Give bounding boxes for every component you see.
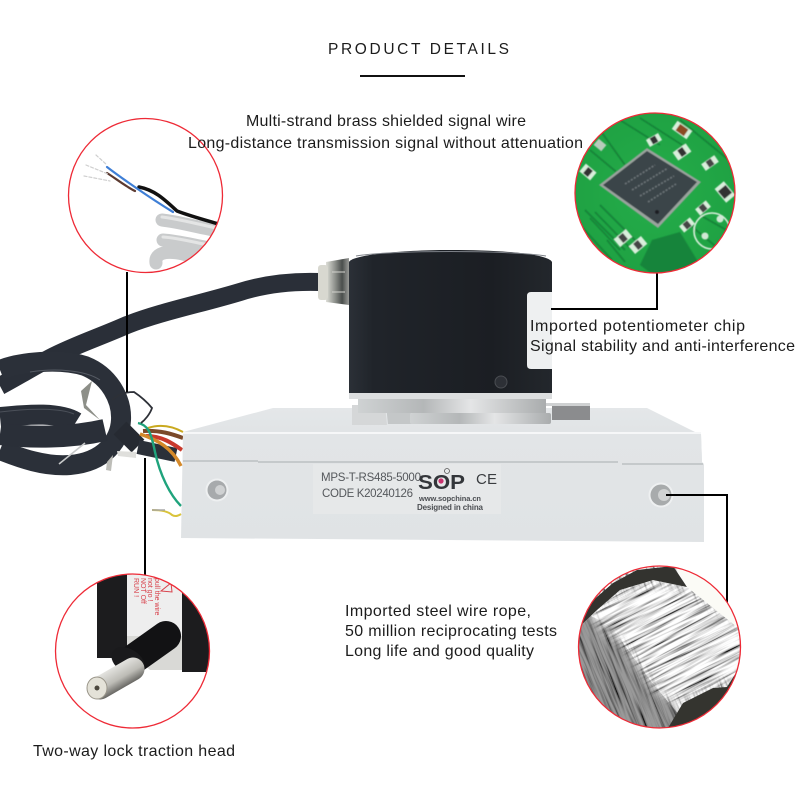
text: potentiometer chip: Imported potentiometer chip <box>530 318 745 335</box>
right mount hole <box>648 482 674 508</box>
copper traces <box>580 118 735 262</box>
text: steel wire rope: 50 million reciprocating tests <box>345 623 557 640</box>
board <box>575 113 735 273</box>
red warning text: not go ! <box>146 578 153 601</box>
coil highlights <box>162 217 222 247</box>
text: signal wire: Long-distance transmission signal without attenuation <box>188 135 583 152</box>
code text: CODE K20240126 <box>322 488 413 500</box>
mounting flange <box>352 398 590 425</box>
circle background <box>578 566 740 728</box>
text: potentiometer chip <box>530 318 795 355</box>
head photo <box>87 570 210 699</box>
wire photo <box>84 155 225 263</box>
top spool flange <box>582 566 687 624</box>
model text: MPS-T-RS485-5000 <box>321 472 421 484</box>
frayed strands <box>84 155 110 181</box>
red warning text <box>132 578 160 615</box>
red warning text: RUN ! <box>132 578 139 597</box>
dark lower strands <box>579 566 740 728</box>
text: steel wire rope <box>345 603 557 660</box>
red ring <box>575 113 735 273</box>
detail circle: PCB chip <box>575 113 735 280</box>
red warning text: pull the wire <box>153 578 160 615</box>
warning triangle <box>161 583 172 592</box>
colored wires <box>112 392 183 516</box>
detail circle: steel wire rope <box>578 565 742 729</box>
tip bore <box>94 686 100 690</box>
cylinder white sticker <box>527 292 552 369</box>
website: www.sopchina.cn <box>418 494 481 503</box>
metal backing <box>127 636 182 670</box>
left black block <box>97 570 127 658</box>
silver ferrule and foil <box>59 381 136 471</box>
brown core <box>107 173 135 191</box>
rubber collar <box>112 658 121 666</box>
detail circle: signal wire <box>68 118 225 272</box>
metal tip <box>87 677 107 699</box>
red ring <box>56 574 210 728</box>
CE mark: CE <box>476 471 497 488</box>
signal cable <box>0 282 320 465</box>
pad dots <box>716 216 724 222</box>
black sleeve <box>135 636 166 658</box>
logo: SOP <box>418 472 465 494</box>
chip marking <box>625 165 676 202</box>
bottom spool flange <box>668 674 736 727</box>
red ring <box>578 566 740 728</box>
text: traction head: Two-way lock traction head <box>33 743 235 760</box>
base front face <box>181 433 704 542</box>
base seam <box>183 461 703 464</box>
cylinder top highlight <box>356 252 546 256</box>
text: potentiometer chip: Signal stability and anti-interference <box>530 338 795 355</box>
designed in china: Designed in china <box>417 503 484 512</box>
circle background <box>68 118 222 272</box>
chip body <box>603 151 697 224</box>
text: signal wire <box>188 113 583 152</box>
circle background <box>56 574 210 728</box>
connector lines <box>127 272 727 604</box>
cable gland <box>318 258 349 305</box>
screw <box>495 376 507 388</box>
product photo: sensor <box>0 250 704 542</box>
blue core <box>107 167 173 212</box>
rope photo <box>579 566 740 728</box>
label plate <box>313 464 501 514</box>
shade on lower strands <box>579 616 678 728</box>
detail circle: traction head <box>56 570 210 728</box>
right black block <box>182 593 209 672</box>
text: steel wire rope: Long life and good quality <box>345 643 534 660</box>
mounting pad ring <box>694 213 730 249</box>
dark ground plane <box>640 232 697 272</box>
top right background <box>677 569 738 628</box>
black cylinder housing <box>349 250 552 393</box>
base top face <box>183 408 702 462</box>
text: steel wire rope: Imported steel wire rope, <box>345 603 531 620</box>
cylinder rim <box>349 393 552 399</box>
SMD parts <box>579 121 735 254</box>
left mount hole <box>206 478 228 502</box>
top front edge highlight <box>183 432 701 434</box>
black jacket <box>139 187 222 225</box>
white sticker <box>127 570 182 636</box>
title underline <box>360 75 465 77</box>
title: PRODUCT DETAILS <box>328 41 509 58</box>
grey coiled cable <box>156 220 225 263</box>
text: signal wire: Multi-strand brass shielded signal wire <box>246 113 526 130</box>
chip dot <box>655 210 659 214</box>
board detail <box>579 118 735 280</box>
red ring <box>68 118 222 272</box>
chip pins <box>599 148 701 228</box>
product label <box>313 464 501 514</box>
bright upper strands <box>587 580 740 708</box>
red warning text: NOT Off <box>139 578 146 604</box>
metal head <box>100 669 133 688</box>
